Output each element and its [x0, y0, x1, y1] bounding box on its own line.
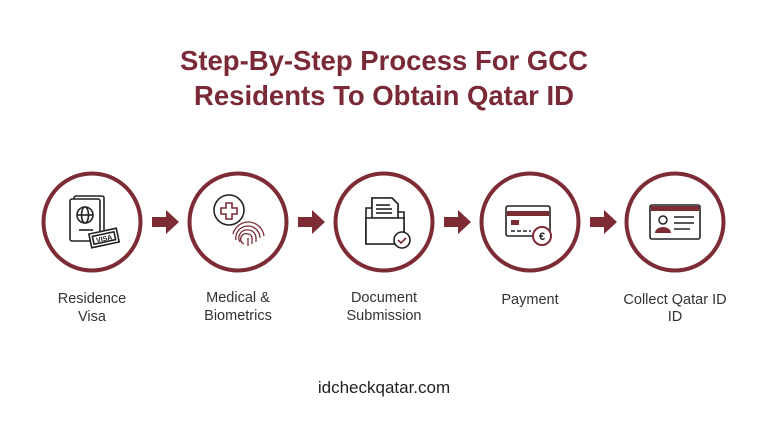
step 3: document submission — [336, 174, 432, 270]
step labels: Collect Qatar ID — [623, 292, 727, 308]
step labels: Payment — [501, 292, 559, 308]
step labels: Visa — [78, 309, 107, 325]
arrow 4 — [590, 210, 617, 234]
title: Step-By-Step Process For GCC — [180, 45, 588, 76]
step 1: residence visa: VISA — [96, 234, 113, 245]
icon: id card — [650, 205, 700, 239]
step labels — [58, 290, 727, 325]
step 1: residence visa — [44, 174, 140, 270]
step labels: Submission — [347, 308, 421, 324]
step 2: medical & biometrics — [190, 174, 286, 270]
step 5: collect qatar id — [626, 174, 724, 270]
step labels: ID — [668, 309, 682, 325]
step labels: Document — [351, 290, 417, 306]
arrow 3 — [444, 210, 471, 234]
title — [180, 45, 588, 111]
arrow 2 — [298, 210, 325, 234]
icon: credit card with euro coin: € — [539, 231, 545, 243]
step labels: Biometrics — [204, 308, 272, 324]
footer url: idcheckqatar.com — [318, 378, 450, 397]
icon: medical cross and fingerprint — [214, 195, 264, 246]
arrow 1 — [152, 210, 179, 234]
icon: folder with check — [366, 198, 410, 248]
icon: passport with visa — [70, 196, 119, 248]
step labels: Medical & — [206, 290, 270, 306]
title: Residents To Obtain Qatar ID — [194, 80, 574, 111]
step labels: Residence — [58, 291, 126, 307]
step 4: payment — [482, 174, 578, 270]
